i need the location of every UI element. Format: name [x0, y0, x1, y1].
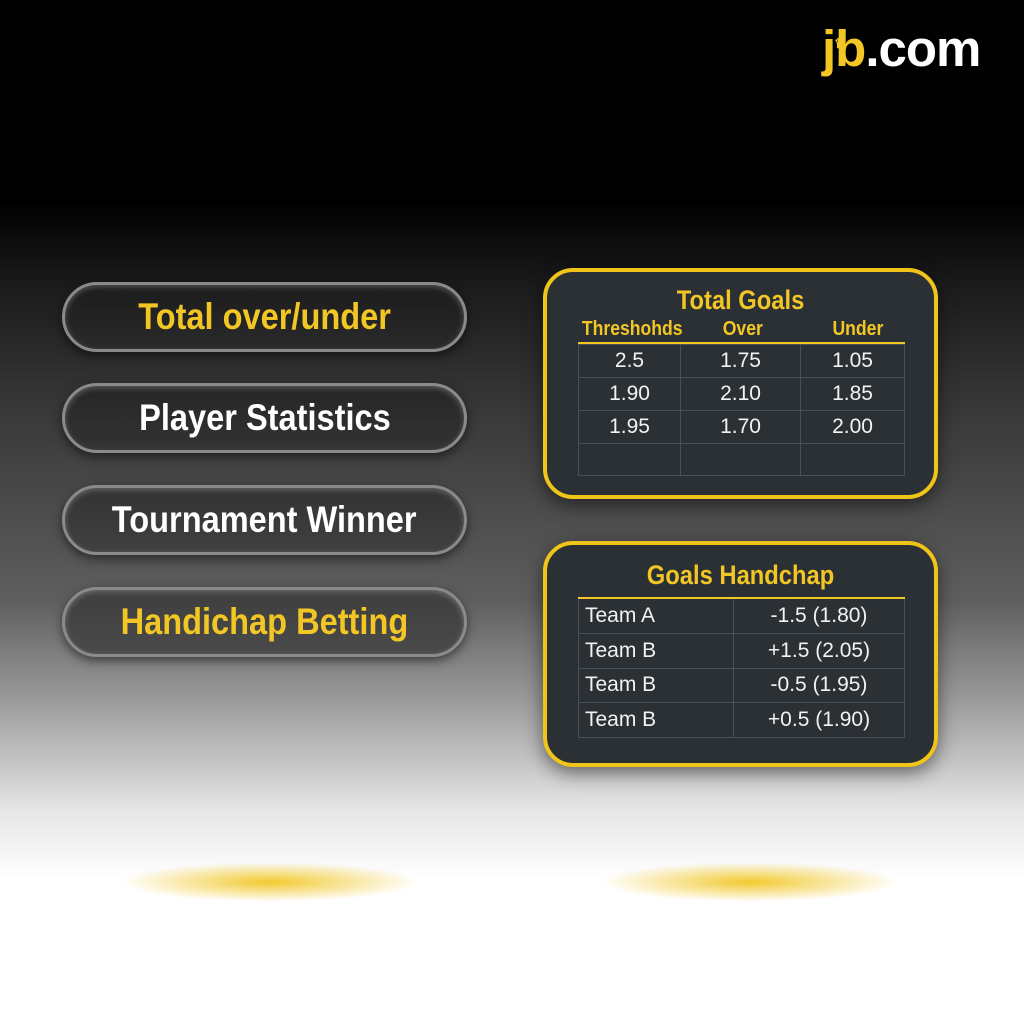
- table: handicap: [578, 597, 905, 738]
- pill: Tournament Winner: Tournament Winner: [112, 499, 417, 540]
- table: goals odds: 1.90: [609, 382, 650, 405]
- table: handicap: -1.5 (1.80): [771, 604, 867, 627]
- table: handicap: Team B: [585, 638, 656, 662]
- panel: Total Goals: [543, 268, 938, 499]
- panel: Goals Handchap: [543, 541, 938, 767]
- pill: Handichap Betting: Handichap Betting: [121, 601, 408, 642]
- table: goals odds: 1.05: [832, 349, 873, 372]
- table headers: Under: [832, 318, 883, 340]
- table: handicap: +1.5 (2.05): [768, 638, 870, 662]
- table: handicap: Team B: [585, 673, 656, 696]
- table headers: Threshohds: [582, 318, 683, 340]
- logo: jb.com: [822, 20, 980, 77]
- table: goals odds: 1.95: [609, 415, 650, 438]
- table: handicap: +0.5 (1.90): [768, 708, 870, 730]
- table: goals odds: 1.70: [720, 415, 761, 438]
- heading: Goals Handchap: Goals Handchap: [647, 560, 834, 590]
- pill: Tournament Winner: [62, 485, 467, 555]
- table: handicap: Team B: [585, 708, 656, 730]
- table headers: Over: [723, 318, 763, 340]
- pill: Total over/under: [62, 282, 467, 352]
- pill: Handichap Betting: [62, 587, 467, 657]
- glow left: [120, 862, 420, 902]
- table: handicap: -0.5 (1.95): [771, 673, 867, 696]
- heading: Total Goals: Total Goals: [677, 285, 804, 315]
- pill: Player Statistics: [62, 383, 467, 453]
- table: goals odds: 2.00: [832, 415, 873, 438]
- pill: Total over/under: Total over/under: [138, 296, 391, 337]
- table: goals odds: 1.75: [720, 349, 761, 372]
- table: handicap: Team A: [585, 604, 655, 627]
- table: goals odds: [578, 344, 905, 476]
- table headers: [578, 318, 905, 344]
- table: goals odds: 2.5: [615, 349, 644, 372]
- pill: Player Statistics: Player Statistics: [139, 397, 390, 438]
- table: goals odds: 2.10: [720, 382, 761, 405]
- glow right: [600, 862, 900, 902]
- logo: ♛: [834, 35, 846, 51]
- table: goals odds: 1.85: [832, 382, 873, 405]
